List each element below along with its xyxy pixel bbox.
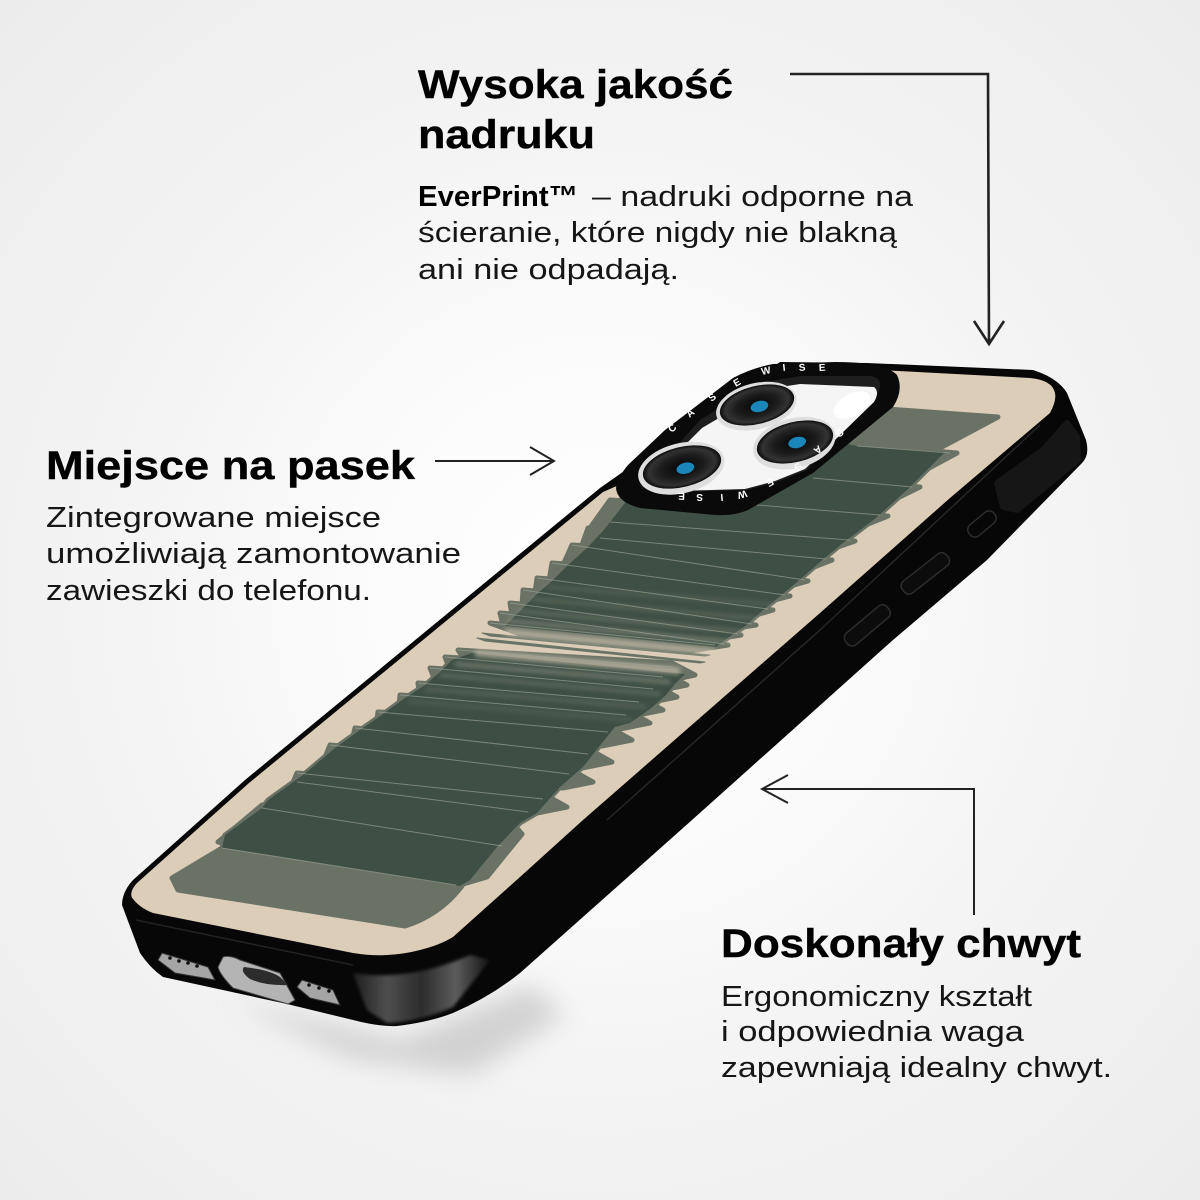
side switch [997,423,1078,510]
single-tone layer of all bands [172,406,998,926]
side button: small [965,508,999,540]
camera ring [616,362,900,515]
ring brand text top: CASEWISE [666,363,826,435]
ring brand text bottom: CASEWISE [678,426,846,502]
body text [721,981,1112,1084]
callout: strap slot [46,444,461,607]
camera window [646,384,877,491]
body text: ścieranie, które nigdy nie blakną [418,217,898,249]
heading: Doskonały chwyt [721,922,1081,966]
body text: zawieszki do telefonu. [46,575,371,607]
lens left [633,433,730,503]
heading: nadruku [418,113,595,157]
speaker right [297,980,340,1005]
waist thin bands [477,633,710,663]
body text: Zintegrowane miejsce [46,502,381,534]
printed back panel [131,370,1055,955]
side button: volume down [842,602,893,648]
case body [122,362,1087,1026]
body text: umożliwiają zamontowanie [46,538,461,570]
body text: – nadruki odporne na [592,181,914,213]
window glare [829,386,875,424]
body text: Ergonomiczny kształt [721,981,1032,1013]
arrow: to grip [762,775,974,915]
arrow: to print [790,74,1004,344]
band highlight lines [222,446,950,885]
lens right [747,409,841,478]
heading: Wysoka jakość [418,63,733,107]
side seam line [607,425,1040,820]
fade toward waist, lower bands [408,653,680,720]
callout: grip [721,922,1112,1084]
body text: i odpowiednia waga [721,1016,1025,1048]
heading: Miejsce na pasek [46,444,416,488]
callout: print quality [418,63,914,286]
fade toward waist, upper bands [505,587,780,652]
side highlight: lower corner gloss [353,955,490,1023]
arrow: to strap slot [435,447,554,475]
speaker left [158,953,215,980]
body text: EverPrint™ [418,181,578,213]
phone case illustration [122,362,1087,1026]
phone shadow [230,985,565,1075]
body text: zapewniają idealny chwyt. [721,1052,1112,1084]
body text: ani nie odpadają. [418,254,679,286]
lens top [711,374,802,438]
body text [46,502,461,607]
charging port [218,956,295,1004]
darker overlap layer [222,430,945,886]
camera module [616,362,900,515]
bottom bumper line [136,920,353,965]
green gradient print [172,406,998,926]
heading [418,63,733,157]
side button: volume up [899,550,952,597]
camera window rim [640,376,880,492]
body text [418,181,914,286]
